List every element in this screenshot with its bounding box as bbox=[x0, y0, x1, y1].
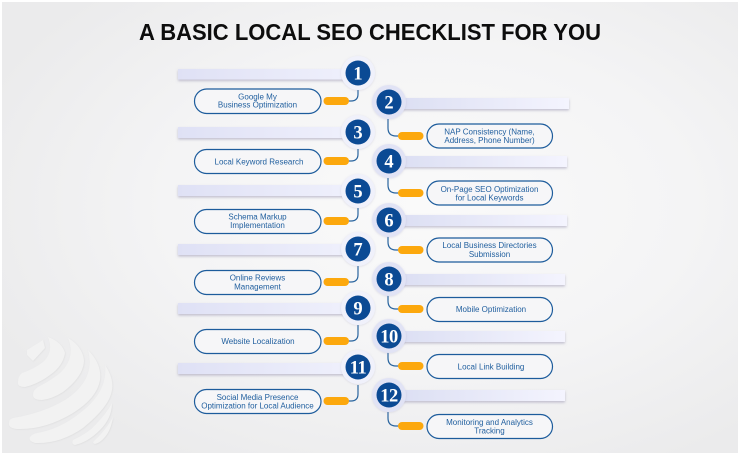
step 9: 9 bbox=[353, 300, 363, 320]
step 8: 8 bbox=[384, 270, 394, 290]
step 5: Implementation bbox=[230, 221, 285, 230]
step 8 bbox=[372, 262, 565, 322]
step 2: Address, Phone Number) bbox=[444, 136, 535, 145]
icon: globe watermark bbox=[9, 337, 113, 445]
step 12 bbox=[372, 378, 565, 438]
step 12: Monitoring and Analytics bbox=[446, 418, 533, 427]
step 12: Tracking bbox=[474, 426, 505, 436]
step 4: for Local Keywords bbox=[455, 194, 524, 202]
step 10: Local Link Building bbox=[458, 362, 524, 372]
step 11: Optimization for Local Audience bbox=[201, 402, 314, 410]
step 11 bbox=[178, 350, 375, 414]
step 4: On-Page SEO Optimization bbox=[441, 185, 538, 194]
step 4: 4 bbox=[384, 152, 394, 172]
title: A BASIC LOCAL SEO CHECKLIST FOR YOU bbox=[139, 19, 601, 45]
step 6: 6 bbox=[384, 212, 394, 232]
step 2: 2 bbox=[384, 94, 394, 114]
step 6 bbox=[372, 203, 567, 262]
step 9 bbox=[178, 291, 375, 354]
step 7: Online Reviews bbox=[230, 274, 285, 282]
step 3: 3 bbox=[353, 124, 363, 144]
step 3 bbox=[178, 115, 375, 174]
step 11: Social Media Presence bbox=[217, 393, 299, 402]
step 6: Local Business Directories bbox=[442, 241, 537, 250]
step 5: 5 bbox=[353, 182, 363, 202]
step 5: Schema Markup bbox=[228, 212, 287, 222]
step 1 bbox=[178, 56, 375, 114]
step 12: 12 bbox=[380, 386, 398, 406]
step 7: 7 bbox=[353, 240, 363, 260]
step 10: 10 bbox=[380, 328, 398, 348]
step 7: Management bbox=[234, 282, 282, 292]
step 1: 1 bbox=[353, 64, 363, 84]
step 3: Local Keyword Research bbox=[215, 158, 303, 166]
step 1: Google My bbox=[238, 92, 277, 102]
step 7 bbox=[178, 232, 375, 294]
step 2 bbox=[372, 85, 569, 148]
step 11: 11 bbox=[350, 358, 366, 378]
step 1: Business Optimization bbox=[218, 100, 297, 110]
step 9: Website Localization bbox=[221, 337, 295, 346]
step 4 bbox=[372, 144, 567, 205]
step 8: Mobile Optimization bbox=[456, 305, 526, 314]
step 10 bbox=[372, 319, 565, 378]
step 6: Submission bbox=[469, 250, 510, 259]
step 5 bbox=[178, 174, 375, 234]
step 2: NAP Consistency (Name, bbox=[444, 128, 535, 136]
